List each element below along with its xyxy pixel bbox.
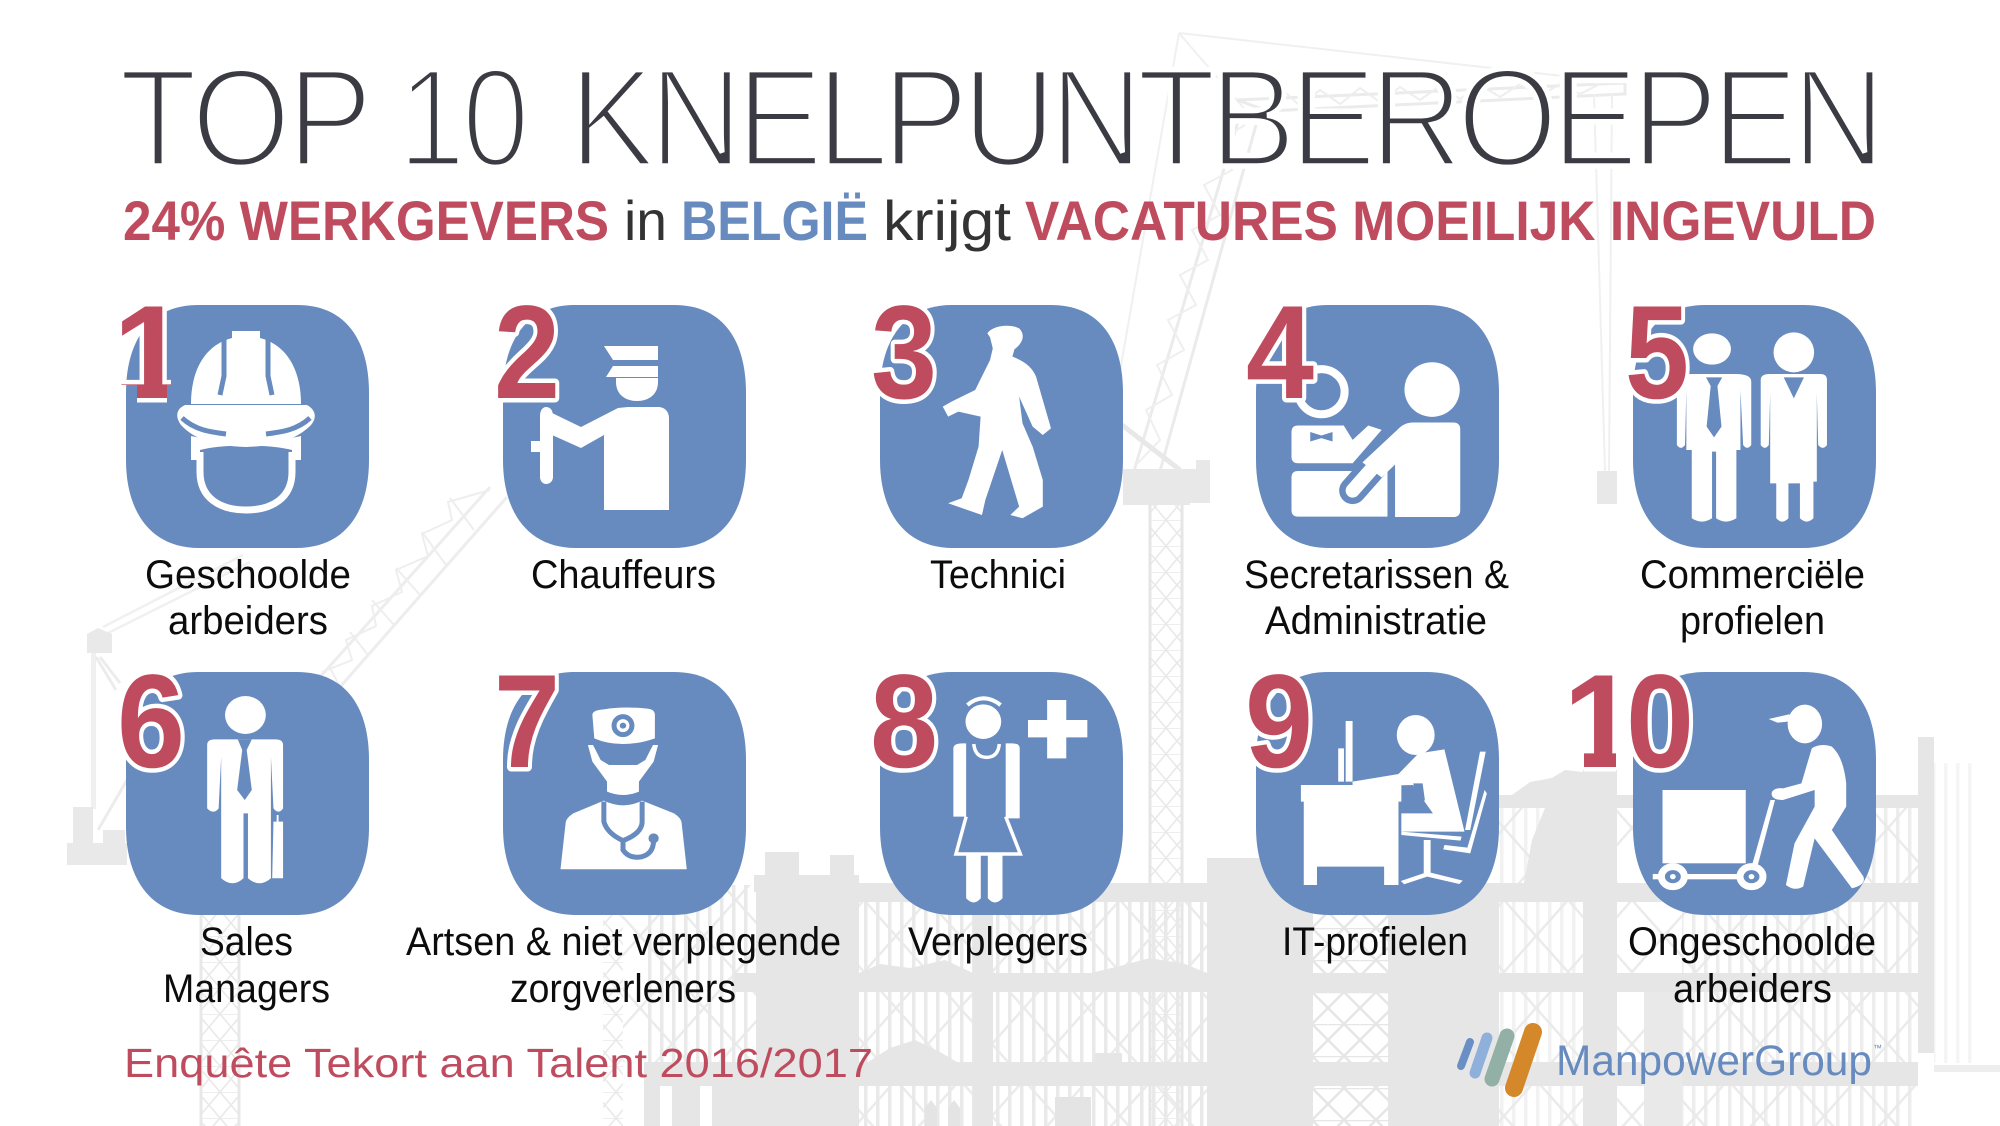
label: profielen <box>1680 599 1825 643</box>
label: Artsen & niet verplegende <box>406 920 841 964</box>
number 7: 7 <box>494 648 560 796</box>
number 10 <box>1572 674 1694 773</box>
number 3: 3 <box>871 279 937 427</box>
label: Secretarissen & <box>1244 553 1509 597</box>
icon: doctor <box>560 707 687 869</box>
label: IT-profielen <box>1282 920 1468 964</box>
background: solid beams and pillars <box>644 737 2000 1126</box>
icon: chauffeur <box>531 346 669 510</box>
subtitle <box>123 189 1876 252</box>
panel: 1 Geschoolde arbeiders <box>121 305 369 634</box>
number 4: 4 <box>1246 279 1314 427</box>
label <box>1640 553 1865 643</box>
number 10: 1 <box>1563 648 1637 796</box>
label <box>145 553 351 643</box>
tile 6 <box>126 672 369 915</box>
subtitle: in <box>624 189 667 252</box>
logo text: ManpowerGroup <box>1556 1037 1872 1085</box>
panel: 4 Secretarissen & Administratie <box>1244 279 1509 643</box>
tile 8 <box>880 672 1123 915</box>
label: Managers <box>163 967 330 1011</box>
panel: 5 Commerciële profielen <box>1625 279 1876 643</box>
panel: 2 Chauffeurs <box>494 279 746 597</box>
logo: ManpowerGroup <box>1461 1032 1882 1088</box>
tile 5 <box>1633 305 1876 548</box>
label: arbeiders <box>168 599 328 643</box>
title: KNELPUNTBEROEPEN <box>569 39 1879 196</box>
label <box>163 920 330 1011</box>
tile 7 <box>503 672 746 915</box>
icon: nurse with plus <box>953 698 1087 902</box>
title: 10 <box>398 39 526 196</box>
subtitle: 24% WERKGEVERS <box>123 189 609 252</box>
panel: 9 IT-profielen <box>1245 648 1499 964</box>
tile 3 <box>880 305 1123 548</box>
number 5: 5 <box>1625 279 1689 427</box>
tile 4 <box>1256 305 1499 548</box>
subtitle: krijgt <box>883 189 1011 252</box>
number 2: 2 <box>494 279 560 427</box>
label: Verplegers <box>908 920 1088 964</box>
panel: 8 Verplegers <box>870 648 1123 964</box>
panel: 10 Ongeschoolde arbeiders <box>1572 672 1876 1002</box>
background: scaffolding <box>603 763 1979 1126</box>
icon: hard hat <box>177 331 315 510</box>
icon: worker with cart <box>1653 705 1864 889</box>
tile 1 <box>126 305 369 548</box>
subtitle: VACATURES MOEILIJK INGEVULD <box>1025 189 1876 252</box>
logo mark <box>1461 1032 1533 1088</box>
label <box>1628 920 1876 1011</box>
tile 9 <box>1256 672 1499 915</box>
label: Technici <box>930 553 1066 597</box>
label: Sales <box>200 920 293 964</box>
icon: secretary at desk <box>1291 362 1460 517</box>
label: Geschoolde <box>145 553 351 597</box>
number 9: 9 <box>1245 648 1313 796</box>
label: Administratie <box>1265 599 1487 643</box>
icon: sales manager with case <box>207 696 283 883</box>
title: TOP <box>119 39 369 196</box>
tile 2 <box>503 305 746 548</box>
panel: 3 Technici <box>871 279 1123 597</box>
subtitle: BELGIË <box>681 189 868 252</box>
number 8: 8 <box>870 648 938 796</box>
number 1: 1 <box>113 279 187 427</box>
icon: walking technician <box>943 326 1051 518</box>
label <box>1244 553 1509 643</box>
source line: Enquête Tekort aan Talent 2016/2017 <box>124 1040 873 1086</box>
number 10: 0 <box>1626 648 1694 796</box>
label: Commerciële <box>1640 553 1865 597</box>
number 6: 6 <box>117 648 185 796</box>
panel: 7 Artsen & niet verplegende zorgverleners <box>406 648 841 1011</box>
label <box>406 920 841 1011</box>
icon: IT worker at desk <box>1301 715 1487 885</box>
label: zorgverleners <box>510 967 736 1011</box>
panel: 6 Sales Managers <box>117 648 369 1011</box>
background: left crane <box>67 487 507 1126</box>
background: top crane <box>1115 33 1625 1126</box>
trademark: ™ <box>1873 1043 1882 1053</box>
tile 10 <box>1633 672 1876 915</box>
label: Chauffeurs <box>531 553 716 597</box>
label: arbeiders <box>1673 967 1832 1011</box>
icon: business man and woman <box>1677 332 1827 522</box>
label: Ongeschoolde <box>1628 920 1876 964</box>
